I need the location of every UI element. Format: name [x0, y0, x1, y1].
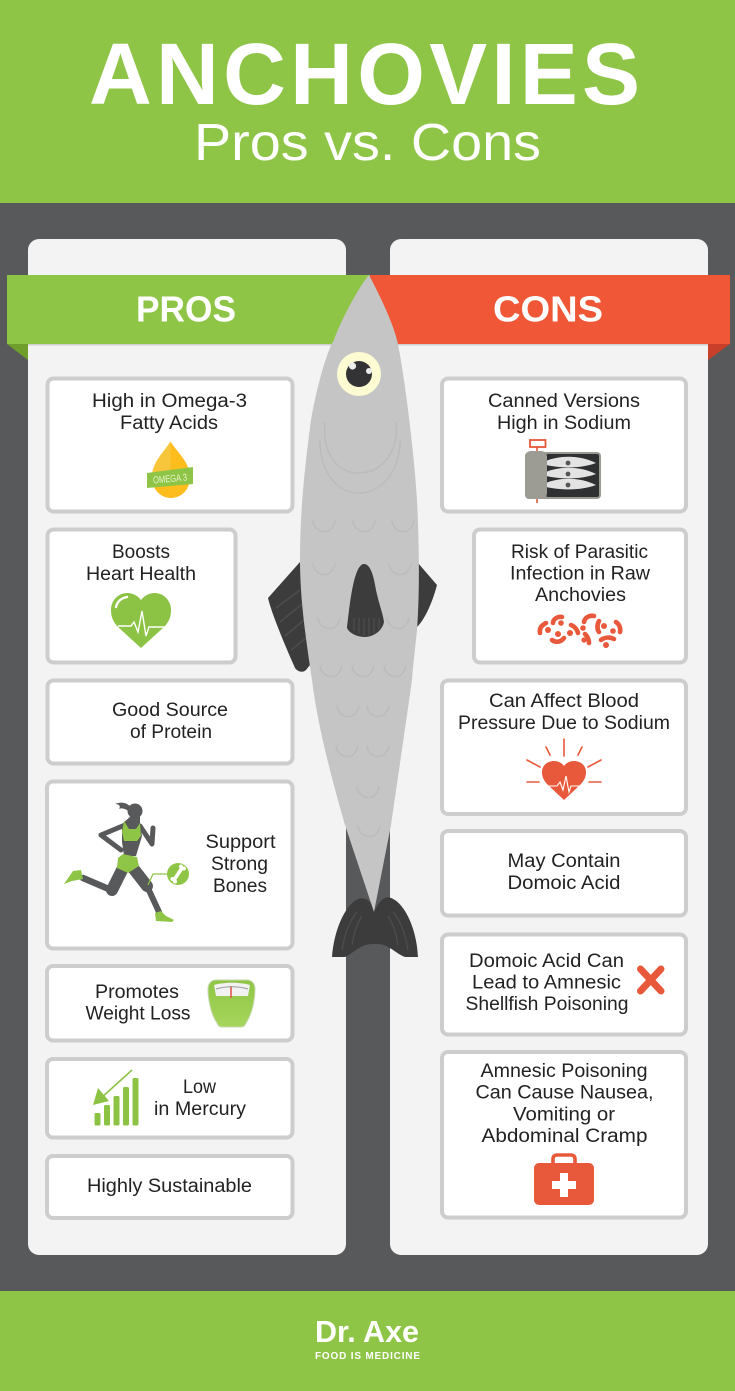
fish tail [332, 897, 418, 957]
card: nausea symptoms: Vomiting or [513, 1104, 616, 1126]
card: nausea symptoms: Abdominal Cramp [482, 1126, 648, 1147]
card: omega-3: Fatty Acids [120, 413, 218, 434]
left fin [268, 562, 310, 672]
card: omega-3: High in Omega-3 [92, 391, 247, 412]
heading: pros: PROS [136, 288, 236, 330]
card: amnesic shellfish poisoning: Lead to Amnesic [472, 972, 621, 994]
icon: falling bar chart [93, 1070, 138, 1126]
card: weight loss: Promotes [95, 982, 179, 1003]
right fin [417, 563, 437, 627]
card: weight loss: Weight Loss [86, 1004, 190, 1024]
card: parasitic infection: Infection in Raw [510, 564, 650, 584]
title: ANCHOVIES [89, 26, 640, 123]
heading: cons: CONS [493, 288, 603, 330]
icon: green heart [111, 593, 171, 648]
panel: cons [390, 239, 708, 1255]
fish eye [337, 352, 381, 396]
fish illustration [268, 275, 437, 957]
card: sustainable: Highly Sustainable [87, 1176, 252, 1197]
icon: red heart with rays [527, 739, 601, 800]
card: strong bones: Support [206, 832, 276, 853]
header band [0, 0, 735, 203]
card: blood pressure: Pressure Due to Sodium [458, 713, 670, 734]
panel: pros [28, 239, 346, 1255]
card: amnesic shellfish poisoning [442, 934, 686, 1034]
card: protein [48, 680, 292, 764]
icon: omega-3 oil drop: OMEGA 3 [153, 473, 188, 486]
card: nausea symptoms [442, 1052, 686, 1218]
gill lines [320, 423, 400, 493]
card: strong bones: Strong [211, 854, 268, 875]
card: protein: of Protein [130, 722, 212, 743]
icon: parasites [540, 616, 620, 648]
card: protein: Good Source [112, 700, 228, 721]
card: nausea symptoms: Amnesic Poisoning [480, 1061, 648, 1082]
card: parasitic infection: Risk of Parasitic [511, 542, 648, 563]
card: omega-3 [48, 378, 292, 512]
card: strong bones [47, 782, 292, 948]
logo: Dr. Axe: Dr. Axe [315, 1314, 419, 1349]
card: parasitic infection: Anchovies [535, 585, 626, 606]
card: heart health: Heart Health [86, 564, 196, 585]
card: sustainable [47, 1156, 292, 1218]
card: mercury: in Mercury [154, 1099, 247, 1120]
card: canned [442, 378, 686, 512]
scales [313, 521, 414, 837]
card: canned: Canned Versions [488, 391, 640, 412]
card: domoic acid [442, 831, 686, 916]
fish body [300, 275, 419, 912]
icon: runner with bone [64, 803, 189, 922]
card: heart health: Boosts [112, 542, 170, 563]
card: amnesic shellfish poisoning: Shellfish Poisoning [466, 994, 628, 1015]
belly fin [347, 564, 384, 637]
card: heart health [48, 530, 236, 662]
card: nausea symptoms: Can Cause Nausea, [476, 1082, 654, 1104]
card: canned: High in Sodium [497, 413, 631, 434]
card: blood pressure: Can Affect Blood [489, 691, 639, 712]
card: weight loss [47, 966, 292, 1040]
card: parasitic infection [474, 530, 686, 662]
icon: omega-3 oil drop [147, 442, 193, 498]
card: domoic acid: May Contain [508, 851, 620, 872]
card: mercury [47, 1059, 292, 1138]
icon: first aid kit [534, 1155, 594, 1205]
tagline: FOOD IS MEDICINE [315, 1351, 420, 1362]
ribbon: pros [7, 275, 370, 360]
card: domoic acid: Domoic Acid [508, 873, 620, 894]
icon: sardine can [525, 440, 601, 503]
card: strong bones: Bones [213, 876, 267, 897]
subtitle: Pros vs. Cons [194, 114, 541, 172]
card: mercury: Low [183, 1077, 216, 1098]
ribbon: cons [370, 275, 730, 360]
card: amnesic shellfish poisoning: Domoic Acid Can [469, 951, 624, 972]
card: blood pressure [442, 680, 686, 814]
footer band [0, 1291, 735, 1391]
icon: weighing scale [208, 980, 255, 1027]
icon: red X [640, 969, 661, 991]
